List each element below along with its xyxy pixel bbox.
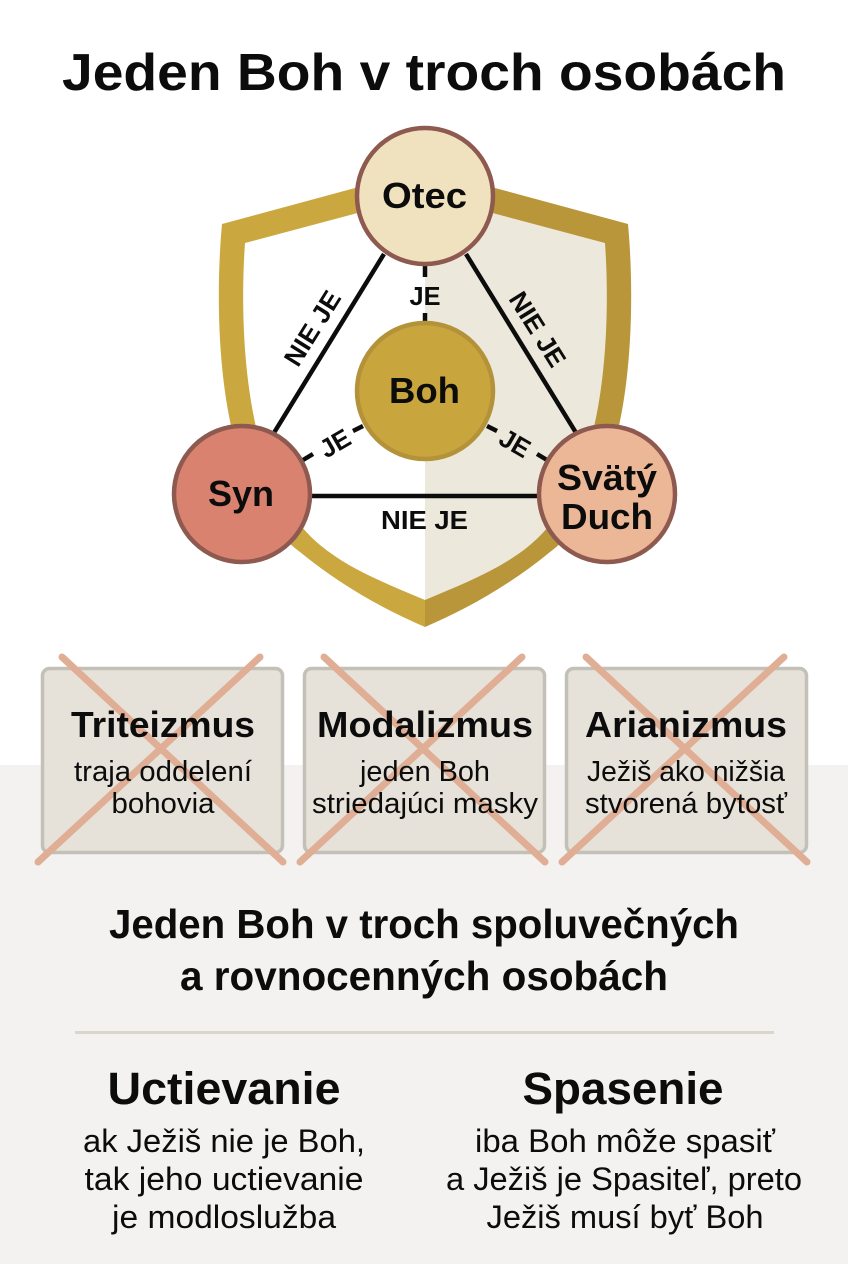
panel: Triteizmus	[38, 657, 283, 862]
text block: Spasenie	[446, 1063, 802, 1235]
text block: Spasenie: a Ježiš je Spasiteľ, preto	[446, 1161, 802, 1197]
panel: Arianizmus: Ježiš ako nižšia	[587, 756, 786, 788]
connector: Otec to Syn, NIE JE: NIE JE	[278, 285, 347, 371]
connector: Boh to Svaty Duch, JE: JE	[494, 422, 536, 464]
text block: Spasenie: Spasenie	[522, 1063, 724, 1114]
title: Jeden Boh v troch osobách	[62, 44, 786, 102]
text block: Uctievanie: ak Ježiš nie je Boh,	[83, 1123, 365, 1159]
text block: Uctievanie: Uctievanie	[108, 1063, 340, 1114]
connector: Otec to Syn, NIE JE	[272, 254, 384, 436]
connector: Otec to Svaty Duch, NIE JE: NIE JE	[503, 286, 572, 372]
panel: Modalizmus: Modalizmus	[317, 704, 533, 745]
node: Syn	[174, 426, 310, 562]
node: Boh	[357, 323, 493, 459]
connector: Otec to Boh, JE: JE	[410, 281, 440, 311]
summary statement: a rovnocenných osobách	[180, 953, 668, 999]
text block: Uctievanie: je modloslužba	[111, 1199, 336, 1235]
node: Otec: Otec	[382, 175, 467, 216]
connector: Otec to Boh, JE	[410, 264, 440, 324]
icon: rejection cross	[300, 657, 545, 862]
node: Otec	[357, 128, 493, 264]
icon: rejection cross	[562, 657, 807, 862]
summary statement	[109, 901, 739, 999]
summary statement: Jeden Boh v troch spoluvečných	[109, 901, 739, 947]
connector: Boh to Syn, JE: JE	[314, 422, 356, 464]
panel: Triteizmus: bohovia	[112, 788, 215, 820]
connector: Otec to Svaty Duch, NIE JE	[466, 254, 578, 436]
icon: rejection cross	[38, 657, 283, 862]
node: Boh: Boh	[389, 370, 460, 411]
node: Svaty Duch: Svätý	[557, 457, 657, 498]
text block: Uctievanie	[83, 1063, 365, 1235]
panel: Triteizmus: traja oddelení	[74, 756, 252, 788]
panel: Modalizmus	[300, 657, 545, 862]
node: Svaty Duch: Duch	[561, 496, 653, 537]
panel: Modalizmus: jeden Boh	[359, 756, 490, 788]
trinity shield diagram	[174, 128, 675, 627]
shield	[219, 176, 631, 627]
text block: Spasenie: Ježiš musí byť Boh	[486, 1199, 764, 1235]
panel: Modalizmus: striedajúci masky	[312, 788, 539, 820]
connector: Syn to Svaty Duch, NIE JE: NIE JE	[381, 505, 468, 535]
panel: Arianizmus: Arianizmus	[585, 704, 787, 745]
node: Syn: Syn	[208, 473, 274, 514]
text block: Spasenie: iba Boh môže spasiť	[475, 1123, 776, 1159]
node: Svaty Duch	[539, 426, 675, 562]
panel: Arianizmus: stvorená bytosť	[585, 788, 788, 820]
panel: Arianizmus	[562, 657, 807, 862]
panel: Triteizmus: Triteizmus	[71, 704, 255, 745]
text block: Uctievanie: tak jeho uctievanie	[84, 1161, 364, 1197]
